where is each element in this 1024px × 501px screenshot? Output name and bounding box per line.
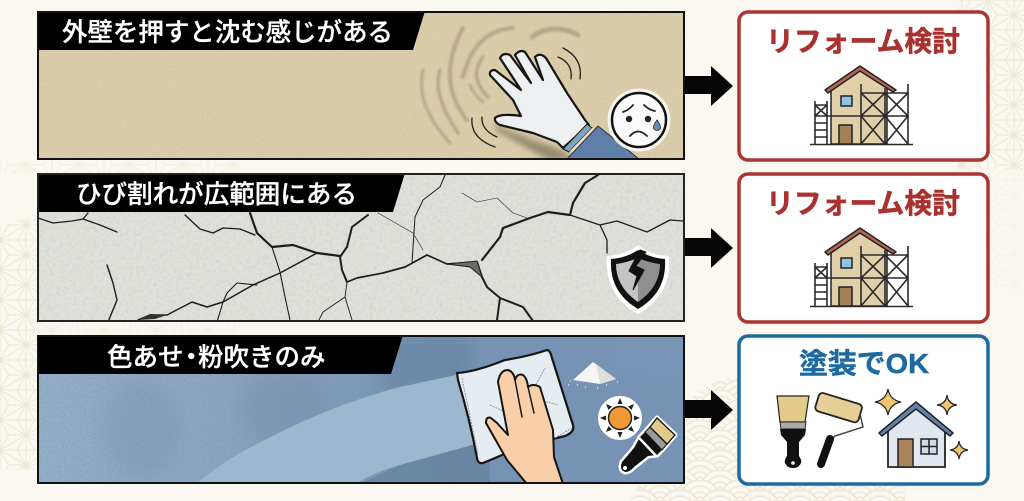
icon: sun bbox=[598, 396, 642, 440]
dent ripples bbox=[422, 28, 578, 143]
heading banner: 外壁を押すと沈む感じがある bbox=[62, 19, 393, 47]
cracks bbox=[38, 175, 683, 322]
heading banner: ひび割れが広範囲にある bbox=[76, 181, 357, 209]
panel: wall sinks when pressed bbox=[37, 11, 685, 160]
card title: 塗装でOK bbox=[799, 348, 929, 379]
card: painting is OK bbox=[739, 336, 988, 484]
icon: clean house with sparkles bbox=[875, 389, 968, 467]
card title: リフォーム検討 bbox=[766, 188, 960, 219]
card title: リフォーム検討 bbox=[766, 26, 960, 57]
heading banner bbox=[37, 335, 403, 374]
card: reform consideration 1 bbox=[739, 12, 988, 160]
card: reform consideration 2 bbox=[739, 174, 988, 322]
hand shadow bbox=[495, 125, 575, 160]
icon: worried face bbox=[608, 88, 670, 152]
icon: powder pile bbox=[568, 362, 618, 388]
arrow 2 bbox=[685, 228, 733, 268]
icon: paint roller bbox=[814, 392, 863, 464]
panel: fading and chalking only bbox=[37, 335, 685, 484]
heading banner: 色あせ・粉吹きのみ bbox=[107, 344, 326, 372]
arrow 1 bbox=[685, 66, 733, 106]
background pattern: asanoha left bbox=[0, 215, 37, 470]
background pattern: asanoha right bbox=[958, 0, 1024, 170]
heading banner bbox=[37, 173, 405, 212]
icon: paint brush bbox=[777, 396, 809, 468]
icon: house with scaffolding bbox=[810, 66, 913, 144]
motion lines bbox=[472, 48, 580, 147]
panel: widespread cracks bbox=[37, 173, 685, 322]
icon: cracked shield bbox=[607, 245, 669, 314]
wiped swoosh bbox=[197, 372, 490, 483]
icon: hand wiping with cloth bbox=[457, 350, 573, 484]
icon: house with scaffolding bbox=[810, 228, 913, 306]
heading banner bbox=[37, 11, 425, 50]
icon: gloved hand pressing wall bbox=[490, 51, 639, 159]
arrow 3 bbox=[685, 390, 733, 430]
background pattern: seigaiha bbox=[630, 378, 905, 501]
icon: paint brush bbox=[621, 418, 675, 472]
